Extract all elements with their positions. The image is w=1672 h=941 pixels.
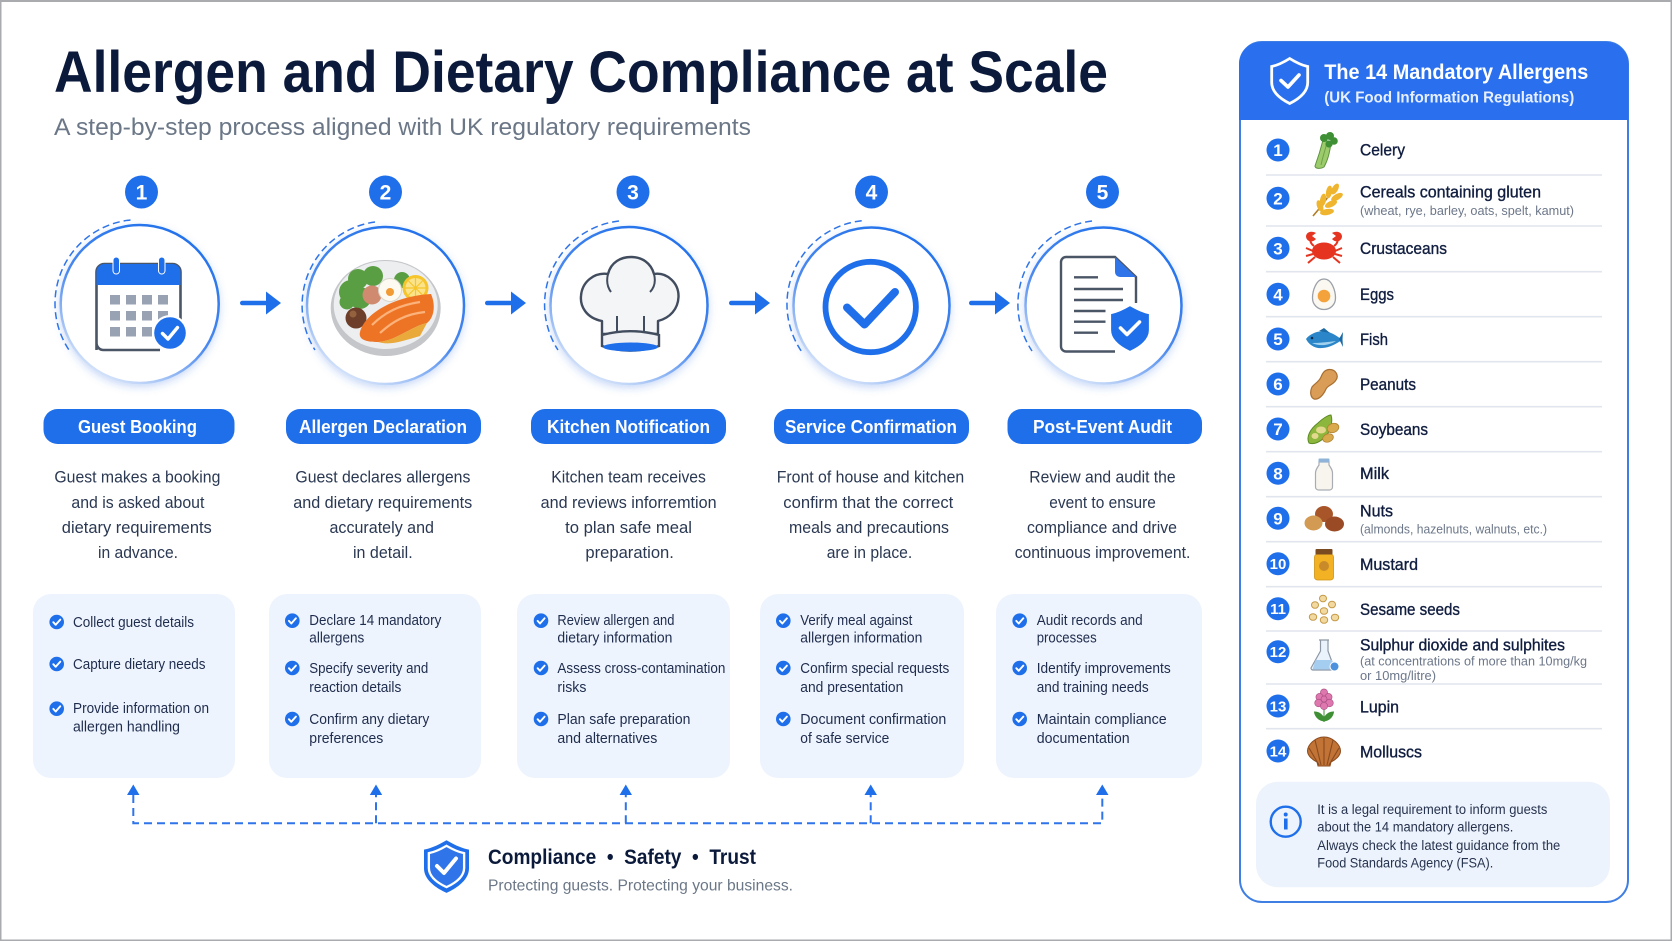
pill: Post-Event Audit: Post-Event Audit xyxy=(1033,417,1172,437)
description: step 3: preparation. xyxy=(585,543,674,562)
panel: step 5 checklist xyxy=(996,594,1202,778)
panel: step 1 checklist: allergen handling xyxy=(73,720,180,736)
description: step 5: Review and audit the xyxy=(1029,468,1176,487)
step 5 number xyxy=(1086,176,1119,208)
subtitle: A step-by-step process aligned with UK regulatory requirements xyxy=(54,114,751,141)
panel: step 3 checklist: Assess cross-contamination xyxy=(557,661,725,677)
info callout xyxy=(1256,782,1610,887)
allergen 12: sulphites xyxy=(1266,637,1587,683)
pill: Allergen Declaration: Allergen Declaration xyxy=(299,417,467,437)
allergen 1: celery xyxy=(1266,132,1406,168)
pill: Kitchen Notification xyxy=(531,409,726,444)
compliance tagline xyxy=(488,846,793,894)
allergen 1: celery: Celery xyxy=(1360,142,1406,160)
step 1 number: 1 xyxy=(136,182,148,204)
panel: step 5 checklist: Audit records and xyxy=(1037,613,1143,629)
step 5 circle icon: document with shield xyxy=(1018,221,1182,384)
panel header xyxy=(1239,42,1628,120)
allergen 14: molluscs: Molluscs xyxy=(1360,743,1422,761)
panel: step 4 checklist: allergen information xyxy=(800,631,922,647)
allergen 8: milk: 8 xyxy=(1273,464,1283,483)
allergen 4: eggs xyxy=(1266,279,1394,310)
pill: Service Confirmation xyxy=(774,409,969,444)
panel: step 4 checklist: Verify meal against xyxy=(800,613,912,629)
panel header: The 14 Mandatory Allergens xyxy=(1324,61,1588,84)
description: step 2: Guest declares allergens xyxy=(295,468,470,487)
panel: step 4 checklist: and presentation xyxy=(800,680,903,696)
panel: step 3 checklist: dietary information xyxy=(557,631,672,647)
allergen 12: sulphites: or 10mg/litre) xyxy=(1360,668,1436,683)
allergen 3: crustaceans: 3 xyxy=(1273,239,1283,258)
allergen 2: cereals xyxy=(1266,182,1574,218)
description: step 4: meals and precautions xyxy=(789,518,949,537)
info callout: about the 14 mandatory allergens. xyxy=(1317,820,1513,835)
allergen 8: milk xyxy=(1266,458,1390,490)
description: step 5: continuous improvement. xyxy=(1015,543,1190,562)
panel: step 3 checklist: Review allergen and xyxy=(557,613,674,629)
panel: step 2 checklist xyxy=(269,594,481,778)
allergen 10: mustard: 10 xyxy=(1270,556,1286,573)
allergen 2: cereals: (wheat, rye, barley, oats, spelt, kamut) xyxy=(1360,203,1574,218)
allergen 5: fish: Fish xyxy=(1360,331,1388,349)
allergen 7: soybeans xyxy=(1266,415,1428,444)
panel: step 1 checklist xyxy=(33,594,235,778)
panel: step 2 checklist: allergens xyxy=(309,631,364,647)
allergen 14: molluscs: 14 xyxy=(1270,743,1287,760)
panel: step 2 checklist: preferences xyxy=(309,731,383,747)
panel: step 4 checklist: Document confirmation xyxy=(800,712,946,728)
step 2 number xyxy=(369,176,402,208)
arrow 1 to 2 xyxy=(240,292,281,314)
description: step 3: and reviews inforremtion xyxy=(541,493,717,512)
description: step 1: Guest makes a booking xyxy=(54,468,220,487)
step 2 circle icon: plate of food xyxy=(302,222,464,384)
compliance tagline: Protecting guests. Protecting your business. xyxy=(488,878,793,894)
description: step 1: dietary requirements xyxy=(62,518,212,537)
description: step 4 xyxy=(777,468,964,562)
info callout: Food Standards Agency (FSA). xyxy=(1317,856,1493,871)
description: step 2: and dietary requirements xyxy=(293,493,472,512)
allergen 9: nuts: 9 xyxy=(1273,509,1283,528)
icon: compliance shield xyxy=(424,840,469,893)
allergen 6: peanuts: Peanuts xyxy=(1360,376,1416,394)
allergen 5: fish: 5 xyxy=(1273,330,1283,349)
description: step 1 xyxy=(54,468,220,562)
panel: step 2 checklist: Declare 14 mandatory xyxy=(309,613,442,629)
allergen 10: mustard xyxy=(1266,549,1418,580)
allergen 2: cereals: Cereals containing gluten xyxy=(1360,184,1541,202)
step 3 number xyxy=(616,176,650,208)
step 4 circle icon: check mark in ring xyxy=(787,221,950,384)
pill: Guest Booking: Guest Booking xyxy=(78,417,197,437)
description: step 1: and is asked about xyxy=(71,493,205,512)
description: step 2: in detail. xyxy=(353,543,413,562)
panel: step 5 checklist: Maintain compliance xyxy=(1037,712,1167,728)
pill: Post-Event Audit xyxy=(1008,409,1202,444)
allergen 12: sulphites: 12 xyxy=(1270,644,1286,661)
step 1 circle icon: calendar xyxy=(55,220,219,383)
allergen 1: celery: 1 xyxy=(1273,141,1283,160)
panel: step 3 checklist: Plan safe preparation xyxy=(557,712,690,728)
arrow 4 to 5 xyxy=(969,292,1010,314)
step 3 circle icon: chef hat xyxy=(545,221,708,384)
allergen 4: eggs: Eggs xyxy=(1360,286,1394,304)
pill: Service Confirmation: Service Confirmation xyxy=(785,417,957,437)
allergen 13: lupin: Lupin xyxy=(1360,699,1399,717)
allergen 10: mustard: Mustard xyxy=(1360,556,1418,574)
allergen 5: fish xyxy=(1266,328,1388,350)
dashed feedback connector with arrows xyxy=(127,784,1108,823)
description: step 3 xyxy=(541,468,717,562)
step 4 number xyxy=(855,176,888,208)
panel: step 5 checklist: Identify improvements xyxy=(1037,661,1171,677)
allergen 4: eggs: 4 xyxy=(1273,285,1283,304)
step 2 number: 2 xyxy=(380,182,391,204)
compliance tagline: Compliance • Safety • Trust xyxy=(488,846,756,869)
description: step 2 xyxy=(293,468,472,562)
panel: step 5 checklist: documentation xyxy=(1037,731,1130,747)
allergen 8: milk: Milk xyxy=(1360,465,1390,483)
allergen 3: crustaceans xyxy=(1266,232,1447,263)
allergen 9: nuts: Nuts xyxy=(1360,503,1393,521)
description: step 3: Kitchen team receives xyxy=(551,468,706,487)
panel: step 3 checklist: and alternatives xyxy=(557,731,657,747)
allergen 11: sesame seeds: 11 xyxy=(1270,601,1286,618)
info callout: Always check the latest guidance from the xyxy=(1317,838,1560,853)
panel: step 5 checklist: processes xyxy=(1037,631,1097,647)
allergen 7: soybeans: 7 xyxy=(1273,420,1283,439)
allergen 2: cereals: 2 xyxy=(1273,189,1283,208)
description: step 4: are in place. xyxy=(827,543,912,562)
description: step 5: compliance and drive xyxy=(1027,518,1177,537)
allergen 3: crustaceans: Crustaceans xyxy=(1360,240,1447,258)
panel: step 4 checklist: of safe service xyxy=(800,731,889,747)
allergen 12: sulphites: Sulphur dioxide and sulphites xyxy=(1360,637,1565,655)
allergen 11: sesame seeds xyxy=(1266,595,1460,623)
description: step 3: to plan safe meal xyxy=(565,518,692,537)
description: step 4: Front of house and kitchen xyxy=(777,468,964,487)
description: step 5 xyxy=(1015,468,1190,562)
step 5 number: 5 xyxy=(1097,182,1109,204)
panel: 14 mandatory allergens xyxy=(1239,42,1628,902)
panel: step 1 checklist: Collect guest details xyxy=(73,615,194,631)
panel: step 2 checklist: reaction details xyxy=(309,680,401,696)
panel: step 4 checklist: Confirm special requests xyxy=(800,661,949,677)
panel header: (UK Food Information Regulations) xyxy=(1324,89,1574,106)
description: step 1: in advance. xyxy=(98,543,178,562)
icon: information xyxy=(1271,807,1301,837)
description: step 4: confirm that the correct xyxy=(783,493,954,512)
info callout: It is a legal requirement to inform guests xyxy=(1317,802,1548,817)
arrow 2 to 3 xyxy=(485,292,526,314)
allergen 6: peanuts xyxy=(1266,369,1416,399)
allergen 9: nuts xyxy=(1266,503,1547,536)
step 1 number xyxy=(125,176,158,208)
allergen 6: peanuts: 6 xyxy=(1273,375,1283,394)
panel: step 1 checklist: Capture dietary needs xyxy=(73,657,206,673)
step 3 number: 3 xyxy=(627,182,639,204)
step 4 number: 4 xyxy=(866,182,878,204)
panel: step 3 checklist xyxy=(517,594,730,778)
allergen 9: nuts: (almonds, hazelnuts, walnuts, etc.) xyxy=(1360,521,1547,536)
panel: step 2 checklist: Confirm any dietary xyxy=(309,712,430,728)
description: step 5: event to ensure xyxy=(1049,493,1156,512)
title: Allergen and Dietary Compliance at Scale xyxy=(54,40,1108,105)
panel: step 5 checklist: and training needs xyxy=(1037,680,1149,696)
allergen 7: soybeans: Soybeans xyxy=(1360,421,1428,439)
allergen 11: sesame seeds: Sesame seeds xyxy=(1360,601,1460,619)
allergen 13: lupin xyxy=(1266,689,1399,722)
pill: Guest Booking xyxy=(44,409,234,444)
panel: step 4 checklist xyxy=(760,594,964,778)
panel: step 3 checklist: risks xyxy=(557,680,586,696)
pill: Kitchen Notification: Kitchen Notification xyxy=(547,417,710,437)
pill: Allergen Declaration xyxy=(286,409,481,444)
allergen 14: molluscs xyxy=(1266,737,1422,766)
panel: step 1 checklist: Provide information on xyxy=(73,701,209,717)
description: step 2: accurately and xyxy=(330,518,434,537)
panel: step 2 checklist: Specify severity and xyxy=(309,661,428,677)
allergen 13: lupin: 13 xyxy=(1270,698,1286,715)
arrow 3 to 4 xyxy=(729,292,770,314)
allergen 12: sulphites: (at concentrations of more than 10mg/kg xyxy=(1360,654,1587,669)
